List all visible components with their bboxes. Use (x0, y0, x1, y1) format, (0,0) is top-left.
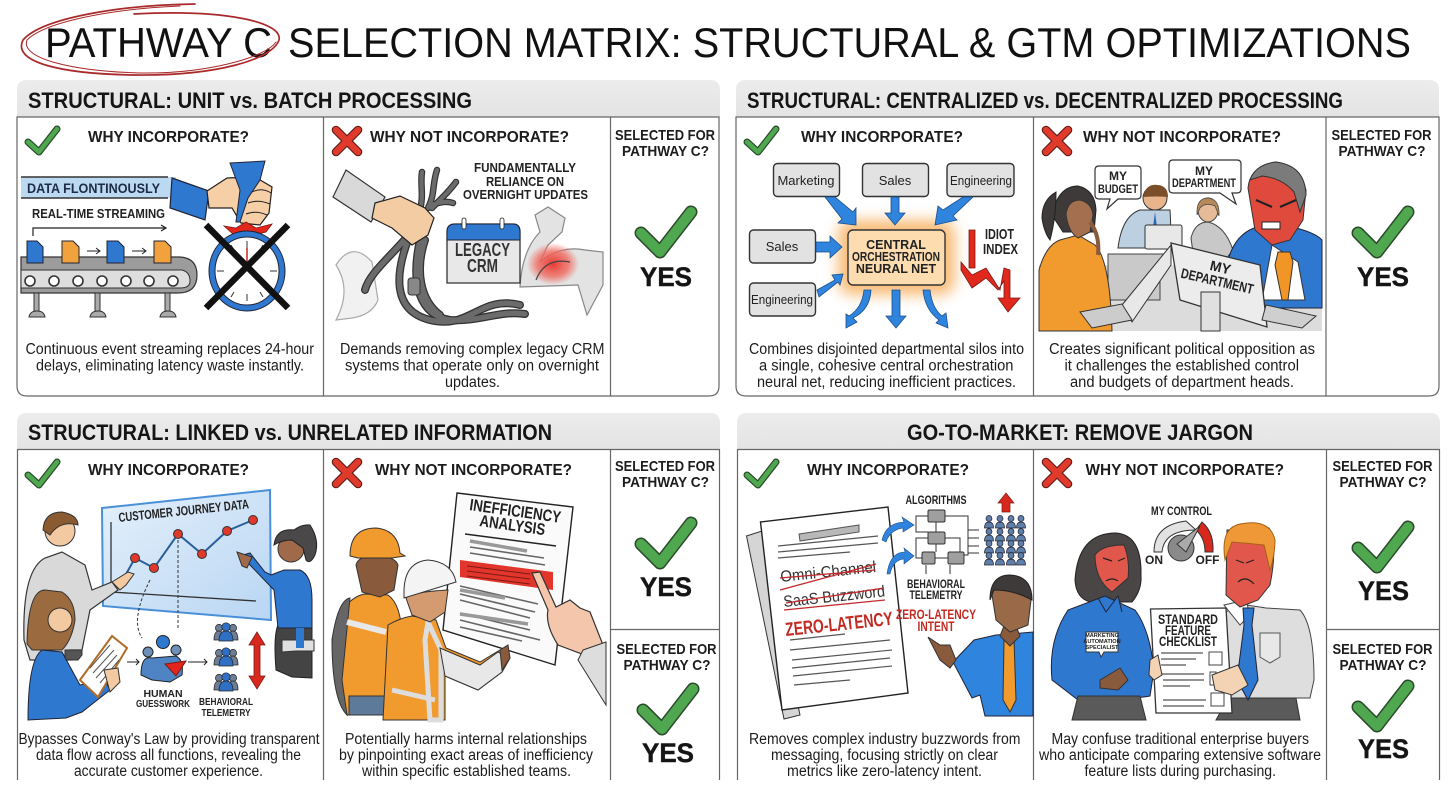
illustration: confused buyers, control gauge and feature checklist: MARKETING (1085, 633, 1119, 639)
illustration: jargon doc, algorithm flow and presenter (746, 493, 1033, 719)
why not incorporate heading: WHY NOT INCORPORATE? (375, 462, 572, 479)
illustration: office politics with angry department head: MY (1195, 164, 1213, 178)
illustration: team around customer journey data screen: TELEMETRY (202, 707, 250, 719)
why incorporate heading: WHY INCORPORATE? (88, 462, 249, 479)
why not incorporate text: who anticipate comparing extensive software (1038, 747, 1321, 764)
selected for pathway c verdict: YES (1357, 262, 1409, 292)
why incorporate heading: WHY INCORPORATE? (88, 129, 249, 146)
second selected for pathway c verdict: SELECTED FOR (616, 641, 717, 658)
illustration: confused buyers, control gauge and feature checklist: OFF (1196, 553, 1220, 567)
illustration: conveyor, streaming and crossed-out clock: DATA FLONTINOUSLY (27, 181, 160, 196)
why incorporate text (26, 341, 314, 374)
illustration: confused buyers, control gauge and feature checklist: MY CONTROL (1151, 504, 1212, 518)
first selected for pathway c verdict (1332, 458, 1433, 606)
illustration: cables, legacy CRM calendar and strained arm: LEGACY (455, 240, 510, 260)
why incorporate heading (28, 462, 249, 485)
why not incorporate heading: WHY NOT INCORPORATE? (370, 129, 569, 146)
why not incorporate text: and budgets of department heads. (1070, 374, 1294, 391)
diagram: silos into central neural net: CENTRAL (866, 238, 926, 252)
why incorporate heading: WHY INCORPORATE? (801, 129, 963, 146)
why not incorporate text: by pinpointing exact areas of inefficiency (339, 747, 593, 764)
diagram: silos into central neural net: Sales (766, 239, 799, 254)
why incorporate text: Removes complex industry buzzwords from (749, 731, 1020, 748)
second selected for pathway c verdict: PATHWAY C? (624, 657, 710, 674)
illustration: confused buyers, control gauge and feature checklist: STANDARD (1158, 611, 1218, 627)
why incorporate text: a single, cohesive central orchestration (759, 358, 1014, 374)
panel header: centralized vs decentralized: STRUCTURAL: CENTRALIZED vs. DECENTRALIZED PROCESSING (747, 88, 1343, 113)
diagram: silos into central neural net: NEURAL NET (856, 262, 937, 276)
why incorporate text (18, 731, 320, 780)
illustration: cables, legacy CRM calendar and strained arm (333, 160, 603, 322)
why incorporate text (749, 341, 1024, 391)
why incorporate heading (747, 129, 963, 152)
why not incorporate heading: WHY NOT INCORPORATE? (1086, 462, 1284, 479)
why not incorporate heading (1046, 462, 1284, 484)
illustration: workers reviewing inefficiency analysis: ANALYSIS (478, 512, 546, 539)
panel: unit vs batch processing (17, 80, 720, 396)
why not incorporate heading (336, 462, 572, 484)
selected for pathway c verdict: PATHWAY C? (622, 143, 709, 160)
illustration: cables, legacy CRM calendar and strained arm: CRM (467, 256, 498, 276)
why not incorporate text: feature lists during purchasing. (1084, 763, 1276, 780)
first selected for pathway c verdict (615, 458, 715, 602)
diagram: silos into central neural net: INDEX (983, 241, 1018, 258)
illustration: jargon doc, algorithm flow and presenter: ZERO-LATENCY (784, 609, 894, 641)
why incorporate text (749, 731, 1020, 780)
why not incorporate text: systems that operate only on overnight (345, 358, 600, 374)
illustration: confused buyers, control gauge and feature checklist: SPECIALIST (1086, 645, 1119, 651)
illustration: workers reviewing inefficiency analysis (332, 493, 606, 720)
illustration: team around customer journey data screen: BEHAVIORAL (199, 696, 253, 708)
why incorporate text: accurate customer experience. (74, 763, 263, 780)
why incorporate text: Combines disjointed departmental silos into (749, 341, 1024, 358)
panel header: remove jargon: GO-TO-MARKET: REMOVE JARGON (907, 420, 1253, 445)
diagram: silos into central neural net: Engineering (751, 292, 813, 307)
illustration: jargon doc, algorithm flow and presenter: ALGORITHMS (906, 493, 966, 507)
why incorporate heading (28, 129, 249, 152)
second selected for pathway c verdict (1332, 641, 1433, 764)
illustration: office politics with angry department head (1039, 160, 1322, 331)
panel frame (736, 117, 1439, 396)
panel frame (738, 449, 1440, 780)
why incorporate text: metrics like zero-latency intent. (787, 763, 982, 780)
illustration: office politics with angry department head: MY (1109, 169, 1127, 183)
panel header: linked vs unrelated: STRUCTURAL: LINKED vs. UNRELATED INFORMATION (28, 420, 552, 445)
why not incorporate heading (336, 129, 569, 152)
why not incorporate heading: WHY NOT INCORPORATE? (1083, 129, 1281, 146)
why not incorporate text: it challenges the established control (1064, 358, 1299, 374)
illustration: confused buyers, control gauge and feature checklist: CHECKLIST (1159, 633, 1217, 649)
panel frame (18, 449, 720, 780)
selected for pathway c verdict: SELECTED FOR (615, 127, 715, 144)
illustration: jargon doc, algorithm flow and presenter: TELEMETRY (910, 588, 962, 602)
second selected for pathway c verdict: PATHWAY C? (1340, 657, 1426, 674)
illustration: cables, legacy CRM calendar and strained arm: RELIANCE ON (486, 174, 564, 189)
first selected for pathway c verdict: SELECTED FOR (615, 458, 715, 475)
first selected for pathway c verdict: YES (640, 572, 692, 602)
illustration: conveyor, streaming and crossed-out clock: REAL-TIME STREAMING (32, 206, 165, 221)
panel: centralized vs decentralized processing (736, 80, 1439, 396)
panel frame (17, 117, 719, 396)
illustration: team around customer journey data screen: GUESSWORK (136, 698, 190, 710)
panel: linked vs unrelated information (17, 413, 720, 780)
illustration: team around customer journey data screen (24, 490, 317, 720)
diagram: silos into central neural net (750, 164, 1020, 328)
illustration: jargon doc, algorithm flow and presenter: SaaS Buzzword (783, 583, 886, 611)
illustration: confused buyers, control gauge and feature checklist: ON (1145, 553, 1163, 567)
diagram: silos into central neural net: Engineering (950, 173, 1012, 188)
diagram: silos into central neural net: Marketing (777, 173, 835, 188)
selected for pathway c verdict (615, 127, 715, 292)
why not incorporate text (1038, 731, 1321, 780)
title: SELECTION MATRIX: STRUCTURAL & GTM OPTIMIZATIONS (288, 19, 1411, 66)
first selected for pathway c verdict: PATHWAY C? (622, 474, 709, 491)
illustration: confused buyers, control gauge and feature checklist (1051, 504, 1314, 720)
hand-drawn red circle around Pathway C (21, 4, 279, 75)
illustration: jargon doc, algorithm flow and presenter: INTENT (918, 618, 955, 634)
selected for pathway c verdict: YES (640, 262, 692, 292)
why not incorporate text: Creates significant political opposition as (1049, 341, 1315, 358)
second selected for pathway c verdict (616, 641, 717, 768)
diagram: silos into central neural net: Sales (879, 173, 912, 188)
illustration: team around customer journey data screen: CUSTOMER JOURNEY DATA (118, 496, 250, 525)
diagram: silos into central neural net: ORCHESTRATION (852, 250, 940, 264)
why not incorporate text: updates. (445, 374, 500, 391)
illustration: office politics with angry department head: BUDGET (1098, 182, 1139, 196)
why not incorporate text (339, 731, 593, 780)
illustration: jargon doc, algorithm flow and presenter: BEHAVIORAL (907, 577, 965, 591)
selected for pathway c verdict: SELECTED FOR (1332, 127, 1432, 144)
panel header: linked vs unrelated (17, 413, 720, 449)
illustration: jargon doc, algorithm flow and presenter: Omni-Channel (780, 559, 877, 586)
why not incorporate text (1049, 341, 1315, 391)
panel: go-to-market remove jargon (737, 413, 1440, 780)
illustration: office politics with angry department head: DEPARTMENT (1179, 265, 1256, 297)
illustration: jargon doc, algorithm flow and presenter: ZERO-LATENCY (896, 606, 976, 622)
illustration: conveyor, streaming and crossed-out clock (21, 161, 288, 317)
title: PATHWAY C (45, 19, 272, 66)
panel header: unit vs batch (17, 80, 720, 117)
why incorporate text: data flow across all functions, revealing the (36, 747, 301, 764)
why not incorporate text: within specific established teams. (361, 763, 571, 780)
why not incorporate text: May confuse traditional enterprise buyers (1052, 731, 1309, 748)
why incorporate text: Bypasses Conway's Law by providing transparent (18, 731, 320, 748)
first selected for pathway c verdict: YES (1358, 576, 1409, 606)
selected for pathway c verdict: PATHWAY C? (1338, 143, 1426, 160)
first selected for pathway c verdict: PATHWAY C? (1340, 474, 1426, 491)
panel header: centralized vs decentralized (736, 80, 1439, 117)
panel header: unit vs batch: STRUCTURAL: UNIT vs. BATCH PROCESSING (28, 88, 472, 113)
panel header: remove jargon (737, 413, 1440, 449)
second selected for pathway c verdict: YES (642, 738, 694, 768)
why incorporate heading (747, 462, 969, 485)
why incorporate text: Continuous event streaming replaces 24-hour (26, 341, 314, 358)
why not incorporate text: Potentially harms internal relationships (345, 731, 587, 748)
why not incorporate text (340, 341, 604, 391)
why incorporate text: delays, eliminating latency waste instantly. (36, 358, 304, 374)
second selected for pathway c verdict: YES (1358, 734, 1409, 764)
first selected for pathway c verdict: SELECTED FOR (1332, 458, 1433, 475)
why not incorporate heading (1046, 129, 1281, 152)
diagram: silos into central neural net: IDIOT (985, 226, 1014, 243)
illustration: office politics with angry department head: MY (1208, 257, 1233, 278)
illustration: cables, legacy CRM calendar and strained arm: OVERNIGHT UPDATES (463, 187, 588, 202)
illustration: cables, legacy CRM calendar and strained arm: FUNDAMENTALLY (474, 160, 576, 175)
why incorporate heading: WHY INCORPORATE? (807, 462, 969, 479)
why incorporate text: messaging, focusing strictly on clear (771, 747, 998, 764)
illustration: confused buyers, control gauge and feature checklist: FEATURE (1165, 622, 1211, 638)
second selected for pathway c verdict: SELECTED FOR (1332, 641, 1433, 658)
illustration: workers reviewing inefficiency analysis: INEFFICIENCY (468, 496, 562, 527)
illustration: team around customer journey data screen: HUMAN (143, 688, 183, 700)
why incorporate text: neural net, reducing inefficient practices. (757, 374, 1016, 391)
illustration: office politics with angry department head: DEPARTMENT (1172, 176, 1237, 190)
selected for pathway c verdict (1332, 127, 1432, 292)
illustration: confused buyers, control gauge and feature checklist: AUTOMATION (1083, 639, 1121, 645)
why not incorporate text: Demands removing complex legacy CRM (340, 341, 604, 358)
